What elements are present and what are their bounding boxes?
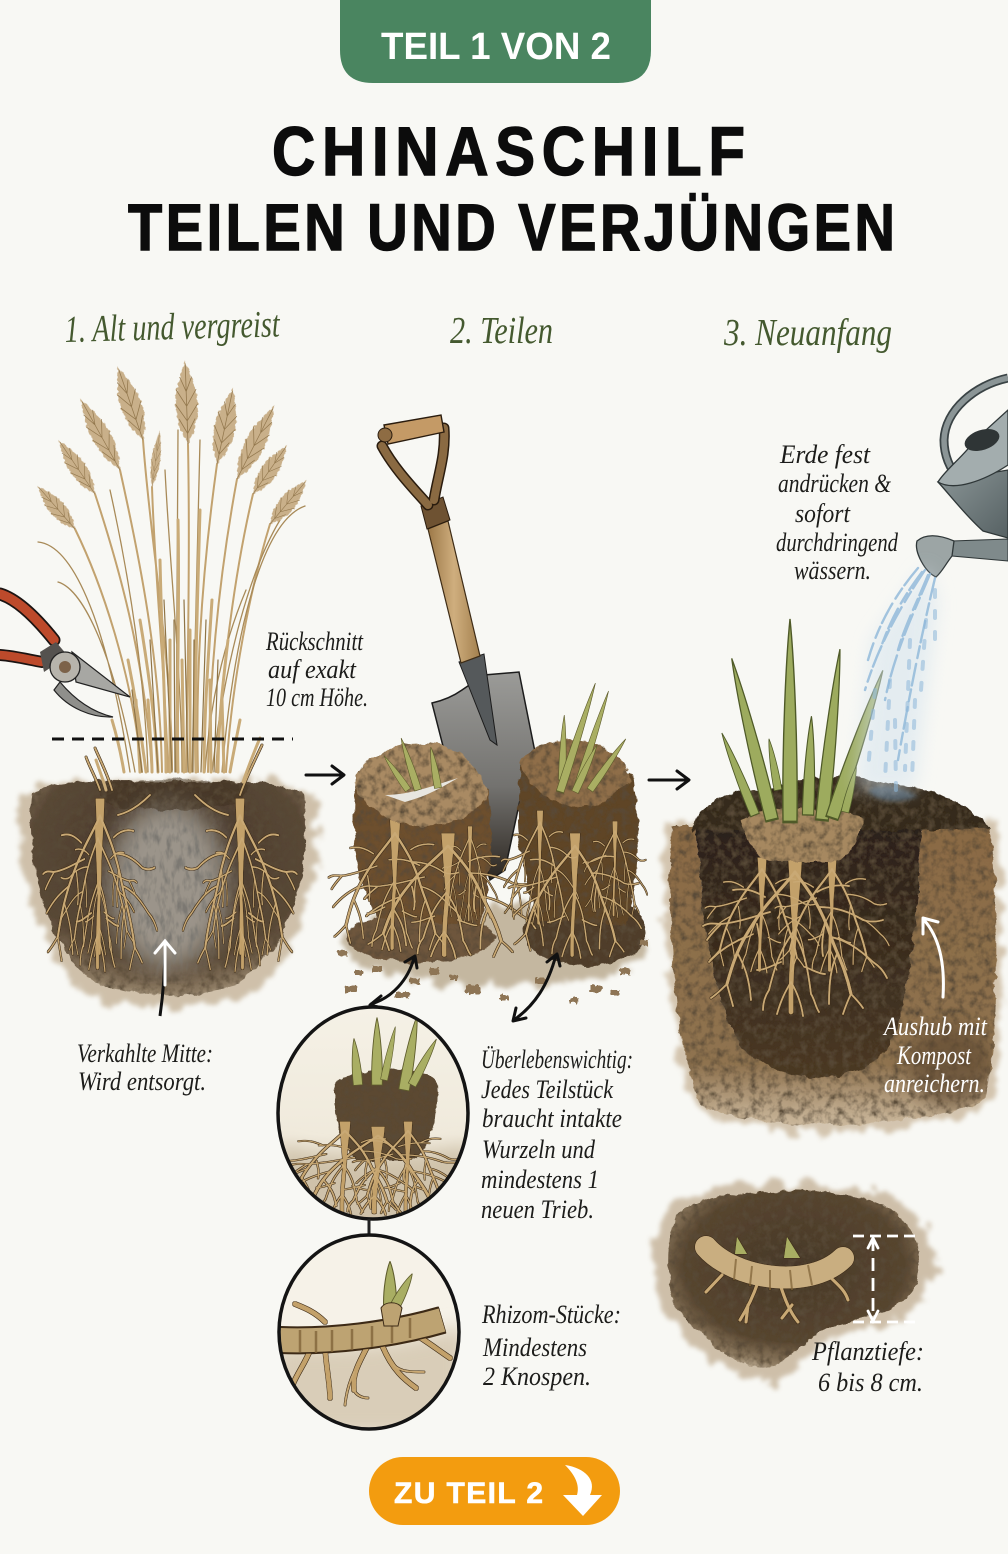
cut line: [52, 738, 293, 740]
circle detail: rhizome: [275, 1234, 465, 1435]
arrow: bald centre: [155, 941, 175, 1016]
text: firm and water: andrücken &: [778, 469, 892, 498]
button: to part 2: [369, 1457, 620, 1525]
text: bald centre: Wird entsorgt.: [78, 1067, 206, 1096]
arrow: cut note to step 2: [306, 766, 344, 784]
grass plumes: [31, 360, 313, 534]
badge: Teil 1 von 2: TEIL 1 VON 2: [381, 26, 611, 68]
title: CHINASCHILF: [272, 112, 745, 190]
text: compost: Aushub mit: [882, 1012, 988, 1041]
text: cut height: Rückschnitt: [265, 627, 364, 656]
arrow: stump to detail text: [513, 954, 560, 1021]
soil ball with roots: [18, 745, 317, 1008]
arrow: stump to detail 1: [370, 956, 417, 1008]
root crown: [740, 809, 863, 862]
planting pit: [663, 776, 1002, 1132]
connector between circles: [368, 1219, 370, 1235]
text: rhizome pieces: Mindestens: [482, 1333, 587, 1362]
text: cut height: [265, 627, 368, 712]
title: [128, 112, 895, 264]
root stump right: [501, 741, 647, 958]
soil patch: [655, 1182, 934, 1382]
green shoots: [718, 619, 889, 822]
plant roots: [703, 856, 889, 1016]
arrow: to step 3: [649, 771, 689, 789]
text: bald centre: [77, 1039, 213, 1096]
text: firm and water: sofort: [795, 499, 851, 528]
text: compost: [882, 1012, 988, 1098]
step heading 2: 2. Teilen: [450, 310, 553, 352]
text: essentials: Überlebenswichtig:: [481, 1045, 633, 1074]
grass stems: [38, 430, 305, 790]
text: essentials: mindestens 1: [481, 1165, 599, 1194]
text: essentials: braucht intakte: [482, 1104, 622, 1133]
panel: old clump: [0, 360, 368, 1096]
text: compost: Kompost: [896, 1041, 972, 1070]
loose soil on ground: [338, 894, 648, 1003]
shoots on stumps: [382, 682, 629, 794]
depth marker: [853, 1236, 915, 1322]
panel: planting depth: [655, 1182, 934, 1397]
rhizome with buds: [706, 1237, 848, 1322]
step heading 1: 1. Alt und vergreist: [64, 303, 281, 351]
text: essentials: Wurzeln und: [482, 1135, 596, 1164]
circle detail: division piece: [276, 1006, 470, 1225]
step heading 3: 3. Neuanfang: [723, 312, 892, 354]
icon: watering can: [916, 378, 1008, 577]
text: firm and water: wässern.: [794, 556, 871, 585]
title: TEILEN UND VERJÜNGEN: [128, 191, 895, 264]
icon: spade: [378, 415, 535, 880]
panel: dividing: [275, 415, 689, 1435]
text: planting depth: [811, 1337, 924, 1397]
text: firm and water: durchdringend: [776, 528, 899, 557]
text: cut height: 10 cm Höhe.: [266, 683, 368, 712]
root stump left: [329, 743, 535, 958]
icon: secateurs: [0, 594, 130, 717]
text: firm and water: [776, 440, 899, 585]
badge: Teil 1 von 2: [340, 0, 651, 83]
text: bald centre: Verkahlte Mitte:: [77, 1039, 213, 1068]
water stream: [855, 566, 938, 790]
text: essentials: neuen Trieb.: [481, 1195, 594, 1224]
arrow: compost: [923, 918, 943, 997]
text: rhizome pieces: [481, 1300, 621, 1391]
text: planting depth: 6 bis 8 cm.: [818, 1368, 923, 1397]
text: cut height: auf exakt: [268, 655, 357, 684]
text: firm and water: Erde fest: [779, 440, 871, 469]
text: rhizome pieces: Rhizom-Stücke:: [481, 1300, 621, 1329]
panel: new start: [663, 378, 1008, 1132]
text: rhizome pieces: 2 Knospen.: [483, 1362, 591, 1391]
text: essentials: [481, 1045, 633, 1224]
text: planting depth: Pflanztiefe:: [811, 1337, 924, 1366]
icon: curved down arrow: [563, 1465, 602, 1516]
text: essentials: Jedes Teilstück: [481, 1075, 613, 1104]
text: compost: anreichern.: [884, 1069, 985, 1098]
button: to part 2: ZU TEIL 2: [394, 1477, 543, 1510]
